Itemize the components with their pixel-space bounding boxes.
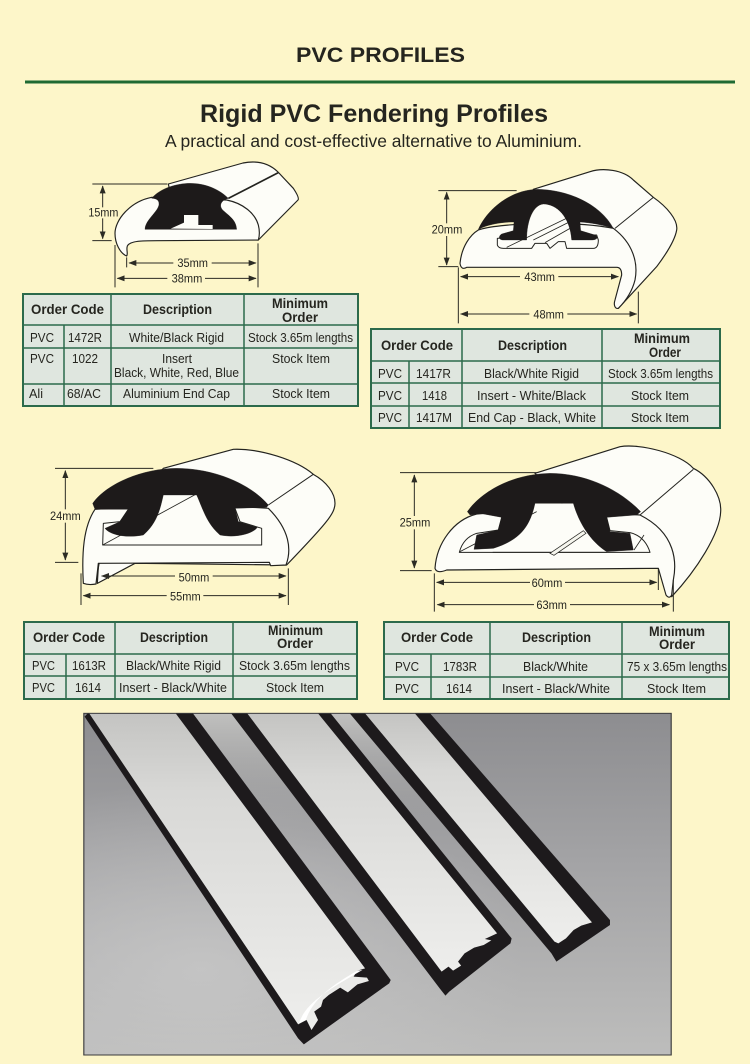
table rows: PVC <box>30 331 54 345</box>
section title: PVC PROFILES <box>296 44 465 67</box>
table rows: PVC <box>378 411 402 425</box>
dimension: 25mm: 25mm <box>400 515 430 529</box>
table rows: Black/White Rigid <box>484 367 579 381</box>
table header <box>401 624 705 652</box>
table header: Minimum <box>272 296 328 311</box>
table header: Minimum <box>649 624 705 639</box>
dimension: 43mm <box>458 267 638 323</box>
dimension: 35mm <box>115 243 258 287</box>
table rows: 1613R <box>72 659 106 673</box>
table rows: Insert - Black/White <box>119 681 227 695</box>
main heading: Rigid PVC Fendering Profiles <box>200 100 548 128</box>
table header: Order <box>282 310 319 325</box>
table header: Order Code <box>33 630 105 645</box>
dimension: 48mm: 48mm <box>533 307 564 321</box>
subheading: A practical and cost-effective alternative to Aluminium. <box>165 131 582 151</box>
table rows: 1614 <box>446 682 472 696</box>
rail 3 <box>350 713 610 962</box>
table header: Order Code <box>401 630 473 645</box>
table rows: PVC <box>32 659 55 673</box>
table rows <box>32 659 350 695</box>
table header <box>33 623 323 651</box>
table rows: Stock 3.65m lengths <box>608 367 713 381</box>
table rows: 68/AC <box>67 387 101 401</box>
table rows: PVC <box>378 389 402 403</box>
dimension: 50mm: 50mm <box>179 570 209 584</box>
table rows: Stock Item <box>272 387 330 401</box>
table rows: Ali <box>29 387 43 401</box>
table rows <box>378 367 713 425</box>
dimension: 50mm <box>81 568 288 605</box>
table: profile 1472R <box>23 294 358 406</box>
table: profile 1613R <box>24 622 357 699</box>
dimension: 35mm: 35mm <box>177 256 208 270</box>
table header: Description <box>522 630 591 645</box>
table rows: Black/White Rigid <box>126 659 221 673</box>
table rows: Aluminium End Cap <box>123 387 230 401</box>
table rows: PVC <box>395 682 419 696</box>
table rows: Stock Item <box>631 411 689 425</box>
dimension: 15mm: 15mm <box>88 206 118 220</box>
table rows: 1472R <box>68 331 102 345</box>
table rows: Stock Item <box>631 389 689 403</box>
table header: Order Code <box>381 338 453 353</box>
table rows: Stock Item <box>272 352 330 366</box>
table header: Description <box>140 630 208 645</box>
table header: Order <box>277 636 314 651</box>
table rows: PVC <box>30 352 54 366</box>
table header: Order <box>649 345 682 360</box>
table rows: PVC <box>32 681 55 695</box>
dimension: 55mm: 55mm <box>170 590 201 604</box>
table header: Order <box>659 637 696 652</box>
table rows: Stock 3.65m lengths <box>248 331 353 345</box>
dimension: 43mm: 43mm <box>524 270 555 284</box>
diagram: profile 1472R <box>88 162 298 287</box>
dimension: 20mm <box>432 191 517 267</box>
photo: three PVC profile lengths <box>84 713 671 1055</box>
table rows <box>29 331 353 401</box>
table rows: Insert <box>162 352 193 366</box>
table rows: 1022 <box>72 352 98 366</box>
dimension: 60mm <box>434 568 673 612</box>
green header rule <box>25 80 735 84</box>
table header: Minimum <box>268 623 323 638</box>
diagram: profile 1613R <box>50 449 335 605</box>
table rows: Black/White <box>523 660 588 674</box>
table rows: Insert - White/Black <box>477 389 587 403</box>
table rows: End Cap - Black, White <box>468 411 596 425</box>
rail 2 <box>231 713 512 996</box>
table rows: PVC <box>395 660 419 674</box>
table rows: Insert - Black/White <box>502 682 610 696</box>
table rows: 75 x 3.65m lengths <box>627 660 727 674</box>
rail 1 <box>85 713 391 1044</box>
dimension: 24mm: 24mm <box>50 509 81 523</box>
table rows: PVC <box>378 367 402 381</box>
table: profile 1417R <box>371 329 720 428</box>
table header <box>31 296 328 325</box>
table header: Order Code <box>31 302 104 317</box>
dimension: 38mm <box>117 272 256 286</box>
table rows <box>395 660 727 696</box>
table rows: 1783R <box>443 660 477 674</box>
table rows: 1417M <box>416 411 452 425</box>
table rows: 1418 <box>422 389 447 403</box>
table rows: Black, White, Red, Blue <box>114 366 239 380</box>
table header: Minimum <box>634 331 690 346</box>
dimension: 24mm <box>50 468 153 562</box>
table header: Description <box>143 302 212 317</box>
table rows: Stock 3.65m lengths <box>239 659 350 673</box>
diagram: profile 1783R <box>400 446 721 612</box>
table rows: Stock Item <box>266 681 324 695</box>
table rows: 1417R <box>416 367 451 381</box>
dimension: 63mm: 63mm <box>536 598 567 612</box>
dimension: 15mm <box>88 184 167 241</box>
table rows: Stock Item <box>647 682 706 696</box>
table header: Description <box>498 338 567 353</box>
table header <box>381 331 690 360</box>
table rows: 1614 <box>75 681 101 695</box>
dimension: 60mm: 60mm <box>532 576 562 590</box>
dimension: 25mm <box>400 473 537 571</box>
table rows: White/Black Rigid <box>129 331 224 345</box>
diagram: profile 1417R <box>432 170 677 323</box>
dimension: 38mm: 38mm <box>172 272 202 286</box>
table: profile 1783R <box>384 622 729 699</box>
dimension: 20mm: 20mm <box>432 222 462 236</box>
